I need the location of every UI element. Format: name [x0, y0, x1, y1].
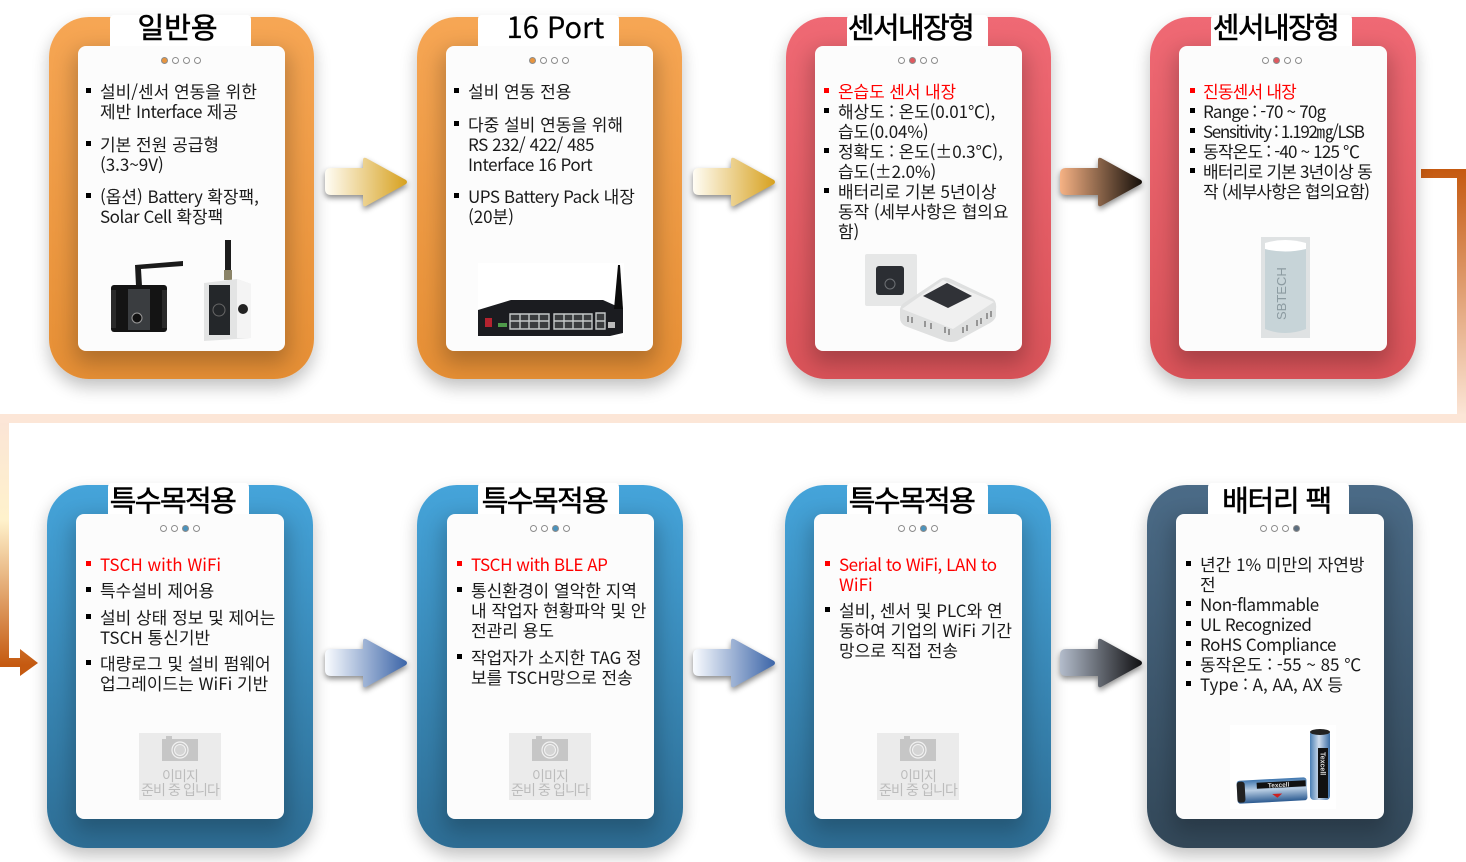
- text block: features: 습도(0.04%): [838, 118, 929, 143]
- text block: features: 대량로그 및 설비 펌웨어: [100, 650, 271, 675]
- text block: features: [86, 551, 275, 695]
- text block: features: 통신환경이 열악한 지역: [471, 577, 637, 602]
- text block: features: [86, 78, 259, 228]
- image: batteries: Texcell: [1318, 752, 1326, 775]
- panel: 배터리 팩: [1147, 485, 1413, 848]
- image: vibration sensor: [1261, 237, 1310, 338]
- text block: features: 진동센서 내장: [1203, 78, 1296, 103]
- text block: features: Non-flammable: [1200, 591, 1319, 616]
- image placeholder: [509, 733, 591, 800]
- text block: features: 온습도 센서 내장: [838, 78, 956, 103]
- text block: features: 배터리로 기본 5년이상: [838, 178, 997, 203]
- text block: features: [454, 78, 635, 228]
- text block: features: 특수설비 제어용: [100, 577, 214, 602]
- text block: features: UL Recognized: [1200, 611, 1311, 636]
- arrow: orange step 2: [689, 158, 778, 212]
- pagination dots: [1262, 57, 1302, 64]
- text block: features: TSCH 통신기반: [100, 624, 210, 649]
- text block: features: 설비, 센서 및 PLC와 연: [839, 597, 1003, 622]
- pagination dots: [1260, 525, 1300, 532]
- text block: features: 년간 1% 미만의 자연방: [1200, 551, 1364, 576]
- text block: features: 작 (세부사항은 협의요함): [1203, 178, 1369, 203]
- image: sensor units: [865, 254, 996, 342]
- text block: features: 다중 설비 연동을 위해: [468, 111, 623, 136]
- text block: features: (옵션) Battery 확장팩,: [100, 183, 259, 208]
- text block: features: [825, 551, 1012, 662]
- panel: 특수목적용 TSCH with BLE AP: [417, 485, 683, 848]
- image: gateway devices: [111, 240, 250, 341]
- text block: features: [457, 551, 646, 689]
- text block: features: Solar Cell 확장팩: [100, 203, 223, 228]
- text block: features: Type : A, AA, AX 등: [1200, 671, 1343, 696]
- image placeholder: 이미지: [900, 766, 936, 786]
- arrow: orange step 1: [321, 158, 410, 212]
- text block: features: (3.3~9V): [100, 151, 164, 176]
- panel: 16 Port: [417, 17, 682, 379]
- text block: features: [1186, 551, 1364, 696]
- text block: features: (20분): [468, 203, 514, 228]
- panel: 특수목적용 Serial to WiFi: [785, 485, 1051, 848]
- image placeholder: [877, 733, 959, 800]
- text block: features: 정확도 : 온도(±0.3℃),: [838, 138, 1003, 163]
- text block: features: [824, 78, 1008, 243]
- text block: features: 설비/센서 연동을 위한: [100, 78, 257, 103]
- text block: features: [1190, 78, 1372, 203]
- text block: features: 보를 TSCH망으로 전송: [471, 664, 633, 689]
- text block: features: 작업자가 소지한 TAG 정: [471, 644, 642, 669]
- text block: features: Range : -70 ~ 70g: [1203, 98, 1325, 123]
- text block: features: 업그레이드는 WiFi 기반: [100, 670, 268, 695]
- text block: features: Serial to WiFi, LAN to: [839, 551, 997, 576]
- arrow: dark step 7: [1056, 638, 1145, 694]
- image placeholder: [139, 733, 221, 800]
- image placeholder: 준비 중 입니다: [511, 780, 589, 800]
- panel: 일반용: [49, 17, 314, 379]
- image placeholder: 이미지: [162, 766, 198, 786]
- text block: features: 해상도 : 온도(0.01℃),: [838, 98, 995, 123]
- text block: features: 내 작업자 현황파악 및 안: [471, 597, 646, 622]
- text block: features: 설비 연동 전용: [468, 78, 571, 103]
- pagination dots: [161, 57, 201, 64]
- text block: features: 동작온도 : -40 ~ 125 ℃: [1203, 138, 1359, 163]
- image placeholder: 이미지: [532, 766, 568, 786]
- text block: features: RS 232/ 422/ 485: [468, 131, 594, 156]
- text block: features: 제반 Interface 제공: [100, 98, 238, 123]
- panel: 센서내장형 온습도: [786, 17, 1051, 379]
- pagination dots: [898, 525, 938, 532]
- panel: 센서내장형 진동: [1150, 17, 1416, 379]
- arrow: blue step 5: [321, 638, 410, 694]
- text block: features: RoHS Compliance: [1200, 631, 1336, 656]
- text block: features: 설비 상태 정보 및 제어는: [100, 604, 275, 629]
- text block: features: 동작온도 : -55 ~ 85 ℃: [1200, 651, 1361, 676]
- image: vibration sensor: SBTECH: [1274, 267, 1289, 320]
- text block: features: TSCH with BLE AP: [471, 551, 607, 576]
- text block: features: 배터리로 기본 3년이상 동: [1203, 158, 1372, 183]
- image: 16 port router: [478, 265, 623, 336]
- image: batteries: Texcell: [1268, 782, 1290, 790]
- arrow: blue step 6: [689, 638, 778, 694]
- text block: features: Interface 16 Port: [468, 151, 592, 176]
- icon: camera: [900, 736, 936, 761]
- image placeholder: 준비 중 입니다: [879, 780, 957, 800]
- text block: features: 기본 전원 공급형: [100, 131, 219, 156]
- arrow: dark orange step 3: [1056, 158, 1145, 212]
- panel: 특수목적용 TSCH with WiFi: [47, 485, 313, 848]
- pagination dots: [530, 525, 570, 532]
- text block: features: WiFi: [839, 571, 873, 596]
- text block: features: 함): [838, 218, 859, 243]
- text block: features: 망으로 직접 전송: [839, 637, 958, 662]
- image: batteries: [1236, 729, 1330, 804]
- icon: camera: [162, 736, 198, 761]
- text block: features: UPS Battery Pack 내장: [468, 183, 635, 208]
- text block: features: Sensitivity : 1.192㎎/LSB: [1203, 118, 1364, 143]
- text block: features: 동하여 기업의 WiFi 기간: [839, 617, 1012, 642]
- icon: camera: [532, 736, 568, 761]
- text block: features: 습도(±2.0%): [838, 158, 936, 183]
- pagination dots: [160, 525, 200, 532]
- text block: features: 동작 (세부사항은 협의요: [838, 198, 1008, 223]
- image placeholder: 준비 중 입니다: [141, 780, 219, 800]
- pagination dots: [529, 57, 569, 64]
- text block: features: TSCH with WiFi: [100, 551, 221, 576]
- text block: features: 전관리 용도: [471, 617, 554, 642]
- pagination dots: [898, 57, 938, 64]
- text block: features: 전: [1200, 571, 1216, 596]
